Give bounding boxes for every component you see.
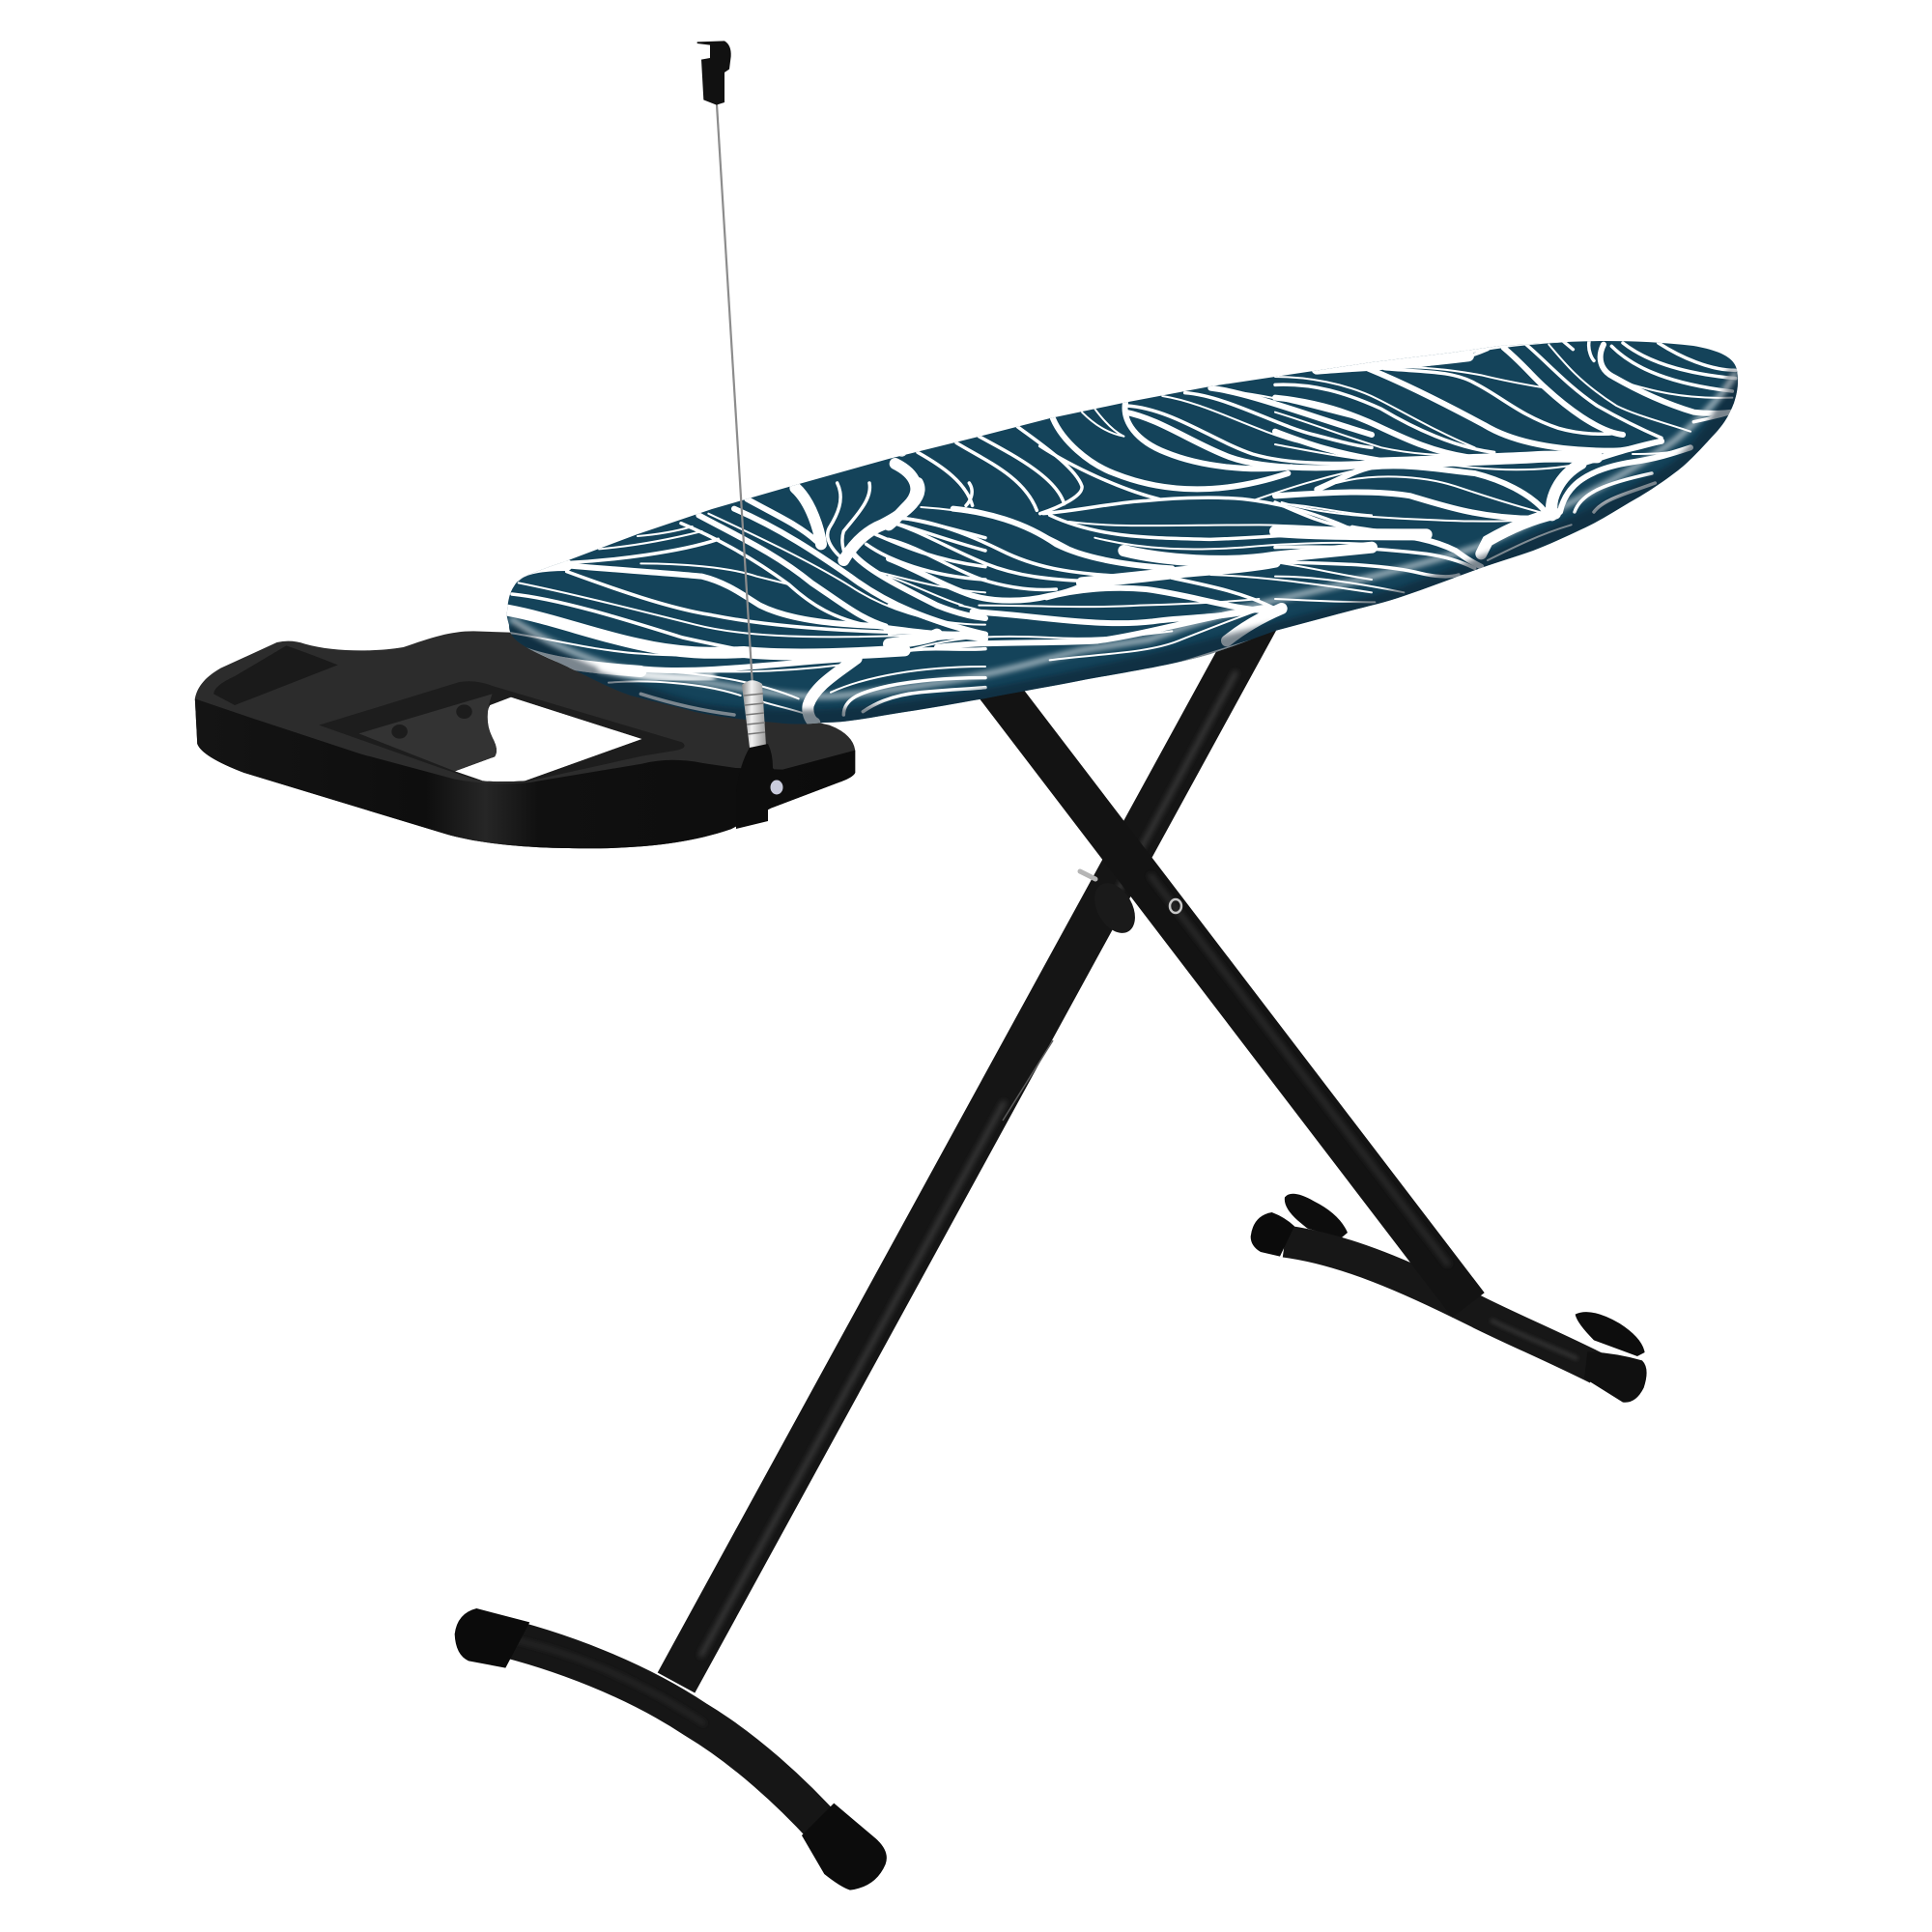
cover shading: lower edge shadow: [509, 370, 1737, 720]
plate screw: left: [391, 724, 408, 739]
tray well: [213, 645, 338, 705]
cover highlight: front end white band: [599, 667, 715, 678]
tray body: [195, 631, 855, 848]
rear foot bar: [1285, 1241, 1597, 1369]
iron rest tray: [195, 631, 855, 848]
leg: tube to rear foot: [980, 667, 1468, 1305]
front foot: curved T bar with rubber caps: [455, 1608, 887, 1890]
clip: [736, 744, 782, 829]
front foot cap: left: [455, 1608, 529, 1668]
cover highlight: lower edge gloss: [510, 372, 1736, 696]
hanging wire with hook: [697, 41, 753, 686]
cover base: [483, 328, 1758, 734]
front foot cap: right: [802, 1804, 887, 1890]
hook: [697, 41, 731, 105]
wave pattern: left section: [507, 476, 985, 723]
ironing board product illustration: [195, 41, 1738, 1890]
rear foot: T bar with caps and pads: [1251, 1194, 1647, 1403]
rear foot cap: left: [1251, 1212, 1294, 1257]
spring: [742, 680, 766, 748]
inner plate: [358, 694, 497, 771]
recessed frame: [319, 681, 685, 782]
rear foot pad: left: [1285, 1194, 1348, 1238]
wire: [717, 104, 753, 686]
rivet: [1170, 899, 1181, 913]
pivot disc: [1086, 876, 1144, 940]
rear foot pad: right: [1576, 1312, 1645, 1356]
pivot pin: [1080, 871, 1095, 879]
wave pattern: middle section: [889, 388, 1372, 669]
plate screw: right: [456, 704, 472, 719]
leg: long tube to front foot: [676, 618, 1259, 1683]
spring and cable clip: [736, 680, 782, 829]
clip button: [771, 781, 782, 794]
rear foot cap: right: [1584, 1351, 1647, 1403]
tray front face: [195, 698, 855, 848]
ironing board cover: [483, 328, 1758, 734]
wave pattern: right section: [1275, 336, 1736, 602]
